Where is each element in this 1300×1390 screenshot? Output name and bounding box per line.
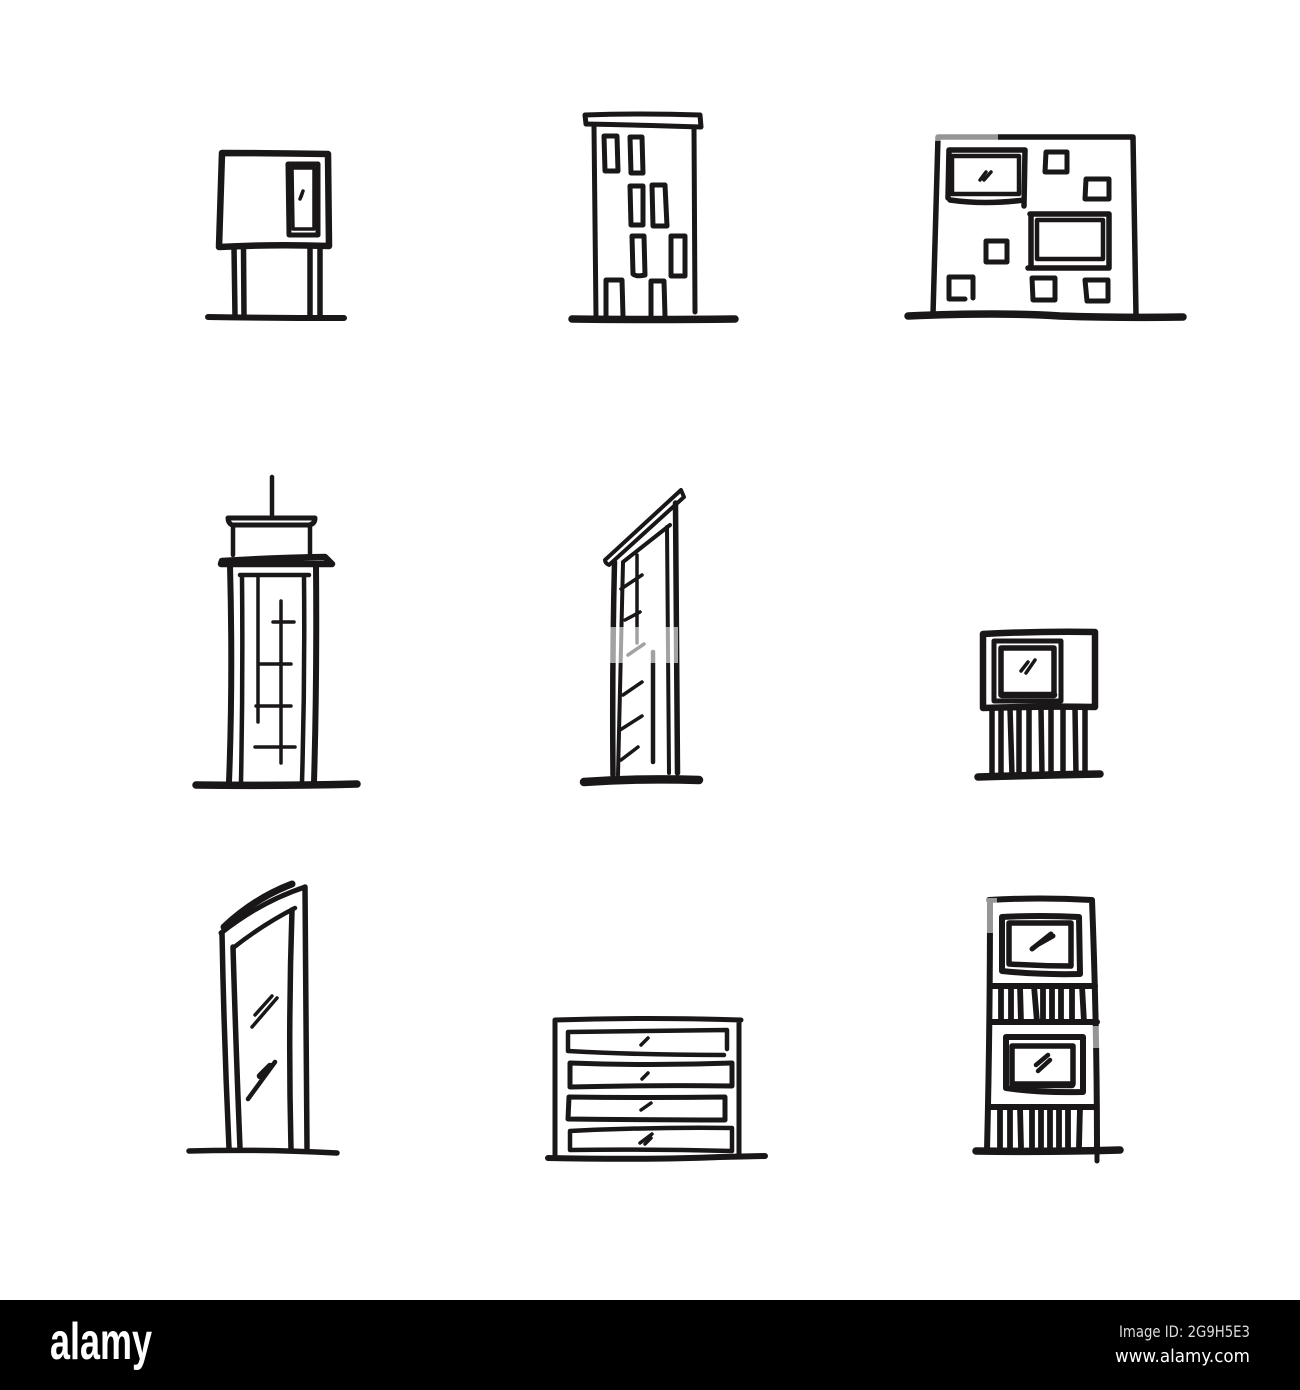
footer logo: alamy (50, 1313, 152, 1371)
icon: wide building with windows (908, 137, 1183, 317)
icon: tall glass tower with curved roof (189, 884, 337, 1153)
watermark fade: building 5 (609, 627, 678, 663)
footer image id: Image ID: 2G9H5E3 (1119, 1322, 1250, 1341)
icon: low wide building with four window rows (548, 1018, 765, 1159)
icon: tall building with two windows and striped bands (976, 898, 1120, 1161)
watermark fade: building 9 (986, 898, 1100, 1048)
icon: tower with antenna (196, 477, 357, 785)
footer website: www.alamy.com (1115, 1346, 1250, 1367)
footer band (0, 1300, 1300, 1390)
icon: apartment tower with flat roof (572, 114, 735, 320)
watermark fade: building 3 top (935, 133, 998, 141)
icon: small building with striped base (978, 632, 1100, 777)
icon: billboard building on legs (208, 153, 344, 318)
icon: tower with slanted roof (584, 490, 699, 782)
